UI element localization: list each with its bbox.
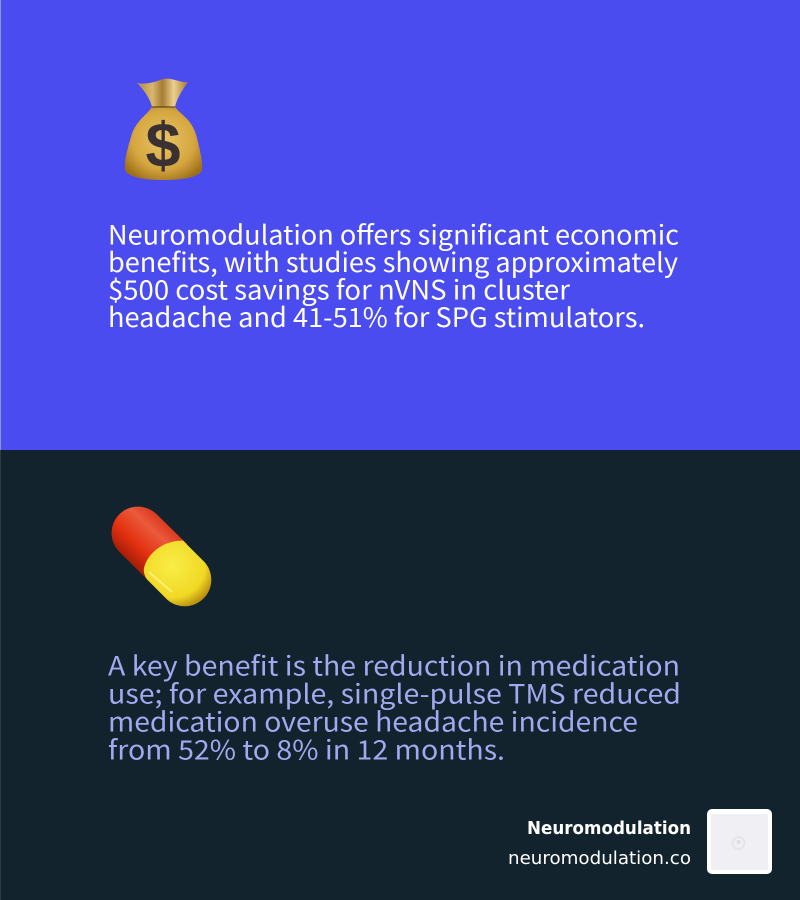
dollar sign glyph: $ — [145, 111, 181, 181]
logo placeholder — [707, 809, 772, 874]
text: medication reduction: from 52% to 8% in 12 months. — [108, 728, 505, 768]
text: economic benefits: Neuromodulation offers significant economic — [108, 214, 679, 252]
icon: capsule — [112, 507, 211, 606]
icon: money bag — [125, 79, 202, 181]
footer website: neuromodulation.co — [508, 849, 691, 869]
footer brand name: Neuromodulation — [527, 819, 691, 839]
text: medication reduction: medication overuse headache incidence — [108, 700, 638, 740]
text: medication reduction: A key benefit is the reduction in medication — [108, 644, 680, 684]
text: economic benefits: headache and 41-51% for SPG stimulators. — [108, 296, 645, 335]
panel: economic benefits — [0, 0, 800, 450]
text: medication reduction: use; for example, single-pulse TMS reduced — [108, 672, 681, 712]
text: economic benefits: $500 cost savings for nVNS in cluster — [108, 268, 571, 308]
panel: medication reduction — [0, 450, 800, 900]
text: economic benefits: benefits, with studies showing approximately — [108, 241, 678, 280]
